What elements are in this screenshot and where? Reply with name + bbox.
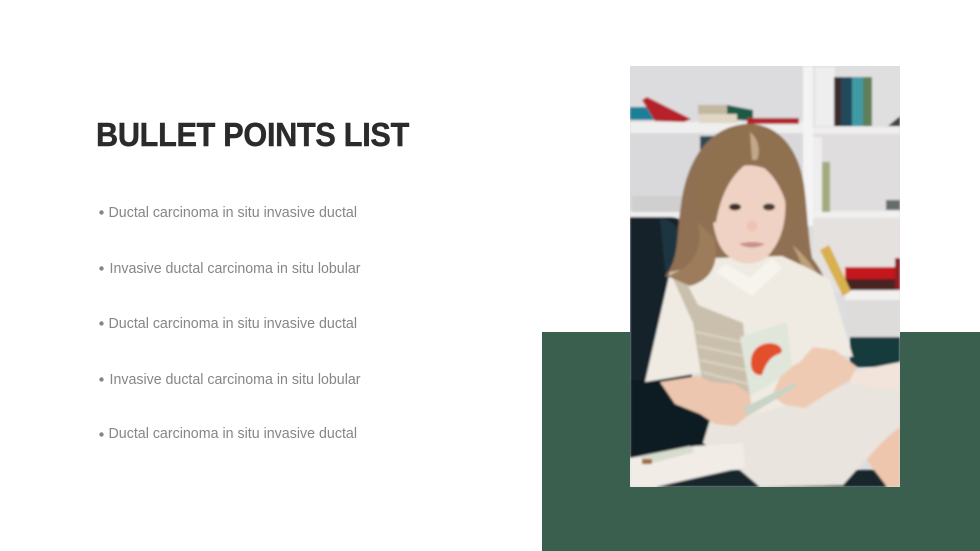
yellow toy stick xyxy=(820,245,851,296)
leg xyxy=(867,427,900,487)
shirt xyxy=(645,256,853,425)
hair front xyxy=(710,124,788,224)
floor xyxy=(630,470,900,487)
bullet item 3: Ductal carcinoma in situ invasive ductal xyxy=(108,315,357,332)
card with chameleon xyxy=(740,322,796,416)
shelves xyxy=(630,66,900,338)
bullet item 4: Invasive ductal carcinoma in situ lobular xyxy=(110,371,360,388)
bullet item 2: Invasive ductal carcinoma in situ lobular xyxy=(110,260,360,277)
bullet item 5: Ductal carcinoma in situ invasive ductal xyxy=(108,425,357,442)
title: BULLET POINTS LIST xyxy=(96,116,409,153)
box xyxy=(630,443,745,487)
arms and hands xyxy=(660,376,752,426)
knit vest xyxy=(670,270,750,396)
sofa xyxy=(630,217,900,480)
face xyxy=(712,165,785,264)
bullet list xyxy=(99,204,361,442)
green background block xyxy=(542,332,980,551)
books xyxy=(630,67,900,290)
bullet item 1: Ductal carcinoma in situ invasive ductal xyxy=(108,204,357,221)
photo: girl holding a card in front of bookshelves xyxy=(630,66,900,487)
skirt xyxy=(703,372,900,487)
hair back xyxy=(664,123,824,278)
